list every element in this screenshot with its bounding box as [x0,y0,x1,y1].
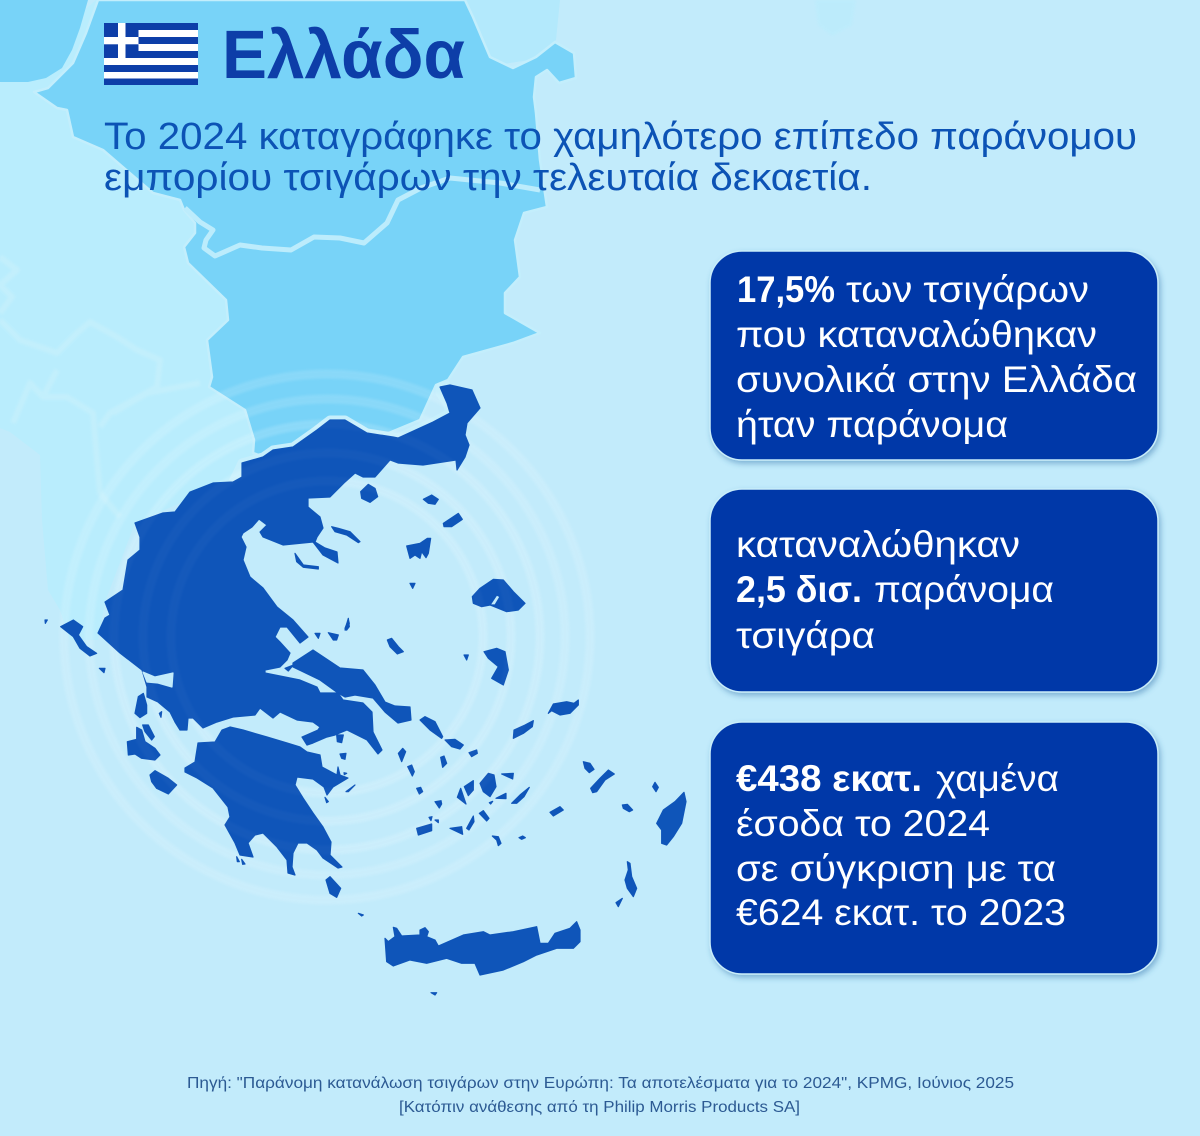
Peloponnese [185,727,348,875]
map background: neighbouring countries [0,0,856,640]
land: small blob top right [815,0,856,36]
stat text: τσιγάρα [736,615,875,656]
Ionian and Saronic islands [127,693,363,916]
north and east Aegean islands [345,484,525,685]
borders: west Balkans [0,257,200,517]
stat text: παράνομα [874,569,1054,610]
stat text [736,269,1137,445]
stat text: ήταν παράνομα [736,404,1008,445]
stat text: 17,5% [737,269,835,310]
stat text [736,758,1066,933]
flag of Greece [104,23,198,85]
stat text: έσοδα το 2024 [736,803,990,844]
land: north-east strip [465,0,560,66]
stat text: που καταναλώθηκαν [736,314,1097,355]
stat text: 2,5 δισ. [736,569,862,610]
subtitle: Το 2024 καταγράφηκε το χαμηλότερο επίπεδο παράνομου [104,116,1137,158]
gulf: Ambracian [143,672,173,687]
panel: 2,5 billion cigarettes [710,489,1158,692]
stat text: σε σύγκριση με τα [736,848,1056,889]
source footer [187,1075,1014,1116]
stat text: συνολικά στην Ελλάδα [736,359,1137,400]
stat text: καταναλώθηκαν [736,524,1020,565]
Cyclades, Dodecanese and Crete [385,700,686,995]
Euboea [293,650,411,723]
land: Romania and Bulgaria [34,0,576,470]
stat text: €438 εκατ. [736,758,922,799]
panel: 17,5% illicit share [710,251,1158,460]
panel: lost revenue [710,722,1158,974]
subtitle: εμπορίου τσιγάρων την τελευταία δεκαετία. [104,157,872,199]
source footer: [Κατόπιν ανάθεσης από τη Philip Morris Products SA] [399,1099,800,1116]
stat text: €624 εκατ. το 2023 [736,892,1066,933]
mainland Greece [98,385,480,754]
stat text: των τσιγάρων [846,269,1089,310]
title: Ελλάδα [222,16,465,93]
border: northern Greece [233,385,450,482]
map of Greece [45,385,686,995]
Chalkidiki fragments [45,527,360,673]
border: Danube [185,178,540,256]
concentric radar rings [64,374,590,900]
land: west Balkans [0,0,300,640]
stat text: χαμένα [936,758,1059,799]
subtitle [104,116,1137,199]
rings over Greece [114,424,540,850]
land: top-left patch [0,0,88,82]
source footer: Πηγή: "Παράνομη κατανάλωση τσιγάρων στην Ευρώπη: Τα αποτελέσματα για το 2024", KPMG, Ιούνιος 2025 [187,1075,1014,1092]
stat text [736,524,1054,656]
